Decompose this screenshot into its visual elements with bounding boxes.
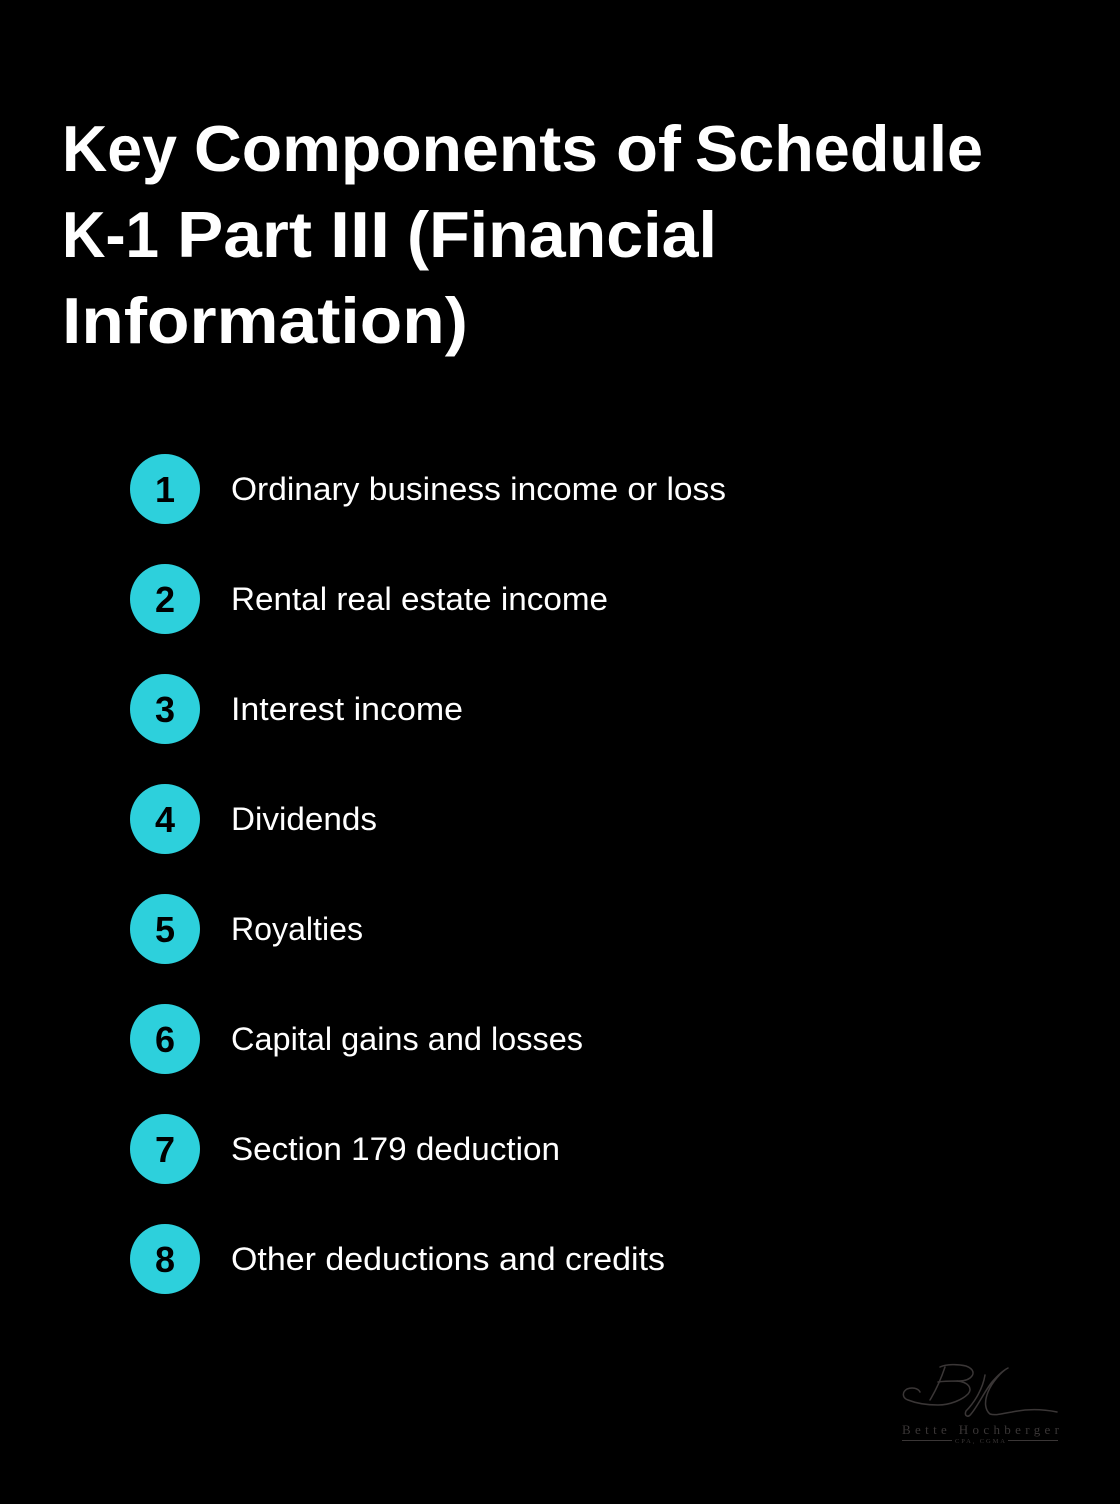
list item 5: Royalties: [231, 911, 363, 947]
list item 2: 2: [155, 579, 175, 620]
list item 1: 1: [155, 469, 175, 510]
list item 1: [130, 454, 726, 524]
title: [62, 112, 983, 357]
logo: Bette Hochberger signature: [902, 1365, 1060, 1445]
list item 4: [130, 784, 377, 854]
title: Schedule: [695, 112, 983, 185]
list item 6: Capital gains and losses: [231, 1021, 583, 1057]
title: K-1: [62, 198, 159, 271]
list item 7: [130, 1114, 560, 1184]
title: (Financial: [407, 198, 717, 271]
logo: Bette Hochberger signature: CPA, CGMA: [955, 1438, 1005, 1445]
logo: Bette Hochberger signature: Bette Hochberger: [902, 1422, 1060, 1437]
list item 6: 6: [155, 1019, 175, 1060]
title: III: [330, 198, 390, 271]
list item 8: [130, 1224, 665, 1294]
list item 8: 8: [155, 1239, 175, 1280]
list item 7: Section 179 deduction: [231, 1131, 560, 1167]
title: Part: [177, 198, 312, 271]
title: of: [616, 112, 681, 185]
list item 3: [130, 674, 463, 744]
list item 5: [130, 894, 363, 964]
list item 4: Dividends: [231, 801, 377, 837]
list item 5: 5: [155, 909, 175, 950]
list item 2: [130, 564, 608, 634]
list item 7: 7: [155, 1129, 175, 1170]
title: Components: [194, 112, 598, 185]
title: Key: [62, 112, 177, 185]
list item 6: [130, 1004, 583, 1074]
list item 3: Interest income: [231, 691, 463, 727]
list item 3: 3: [155, 689, 175, 730]
list item 4: 4: [155, 799, 175, 840]
list item 1: Ordinary business income or loss: [231, 471, 726, 507]
list item 8: Other deductions and credits: [231, 1241, 665, 1277]
list item 2: Rental real estate income: [231, 581, 608, 617]
title: Information): [62, 284, 468, 357]
